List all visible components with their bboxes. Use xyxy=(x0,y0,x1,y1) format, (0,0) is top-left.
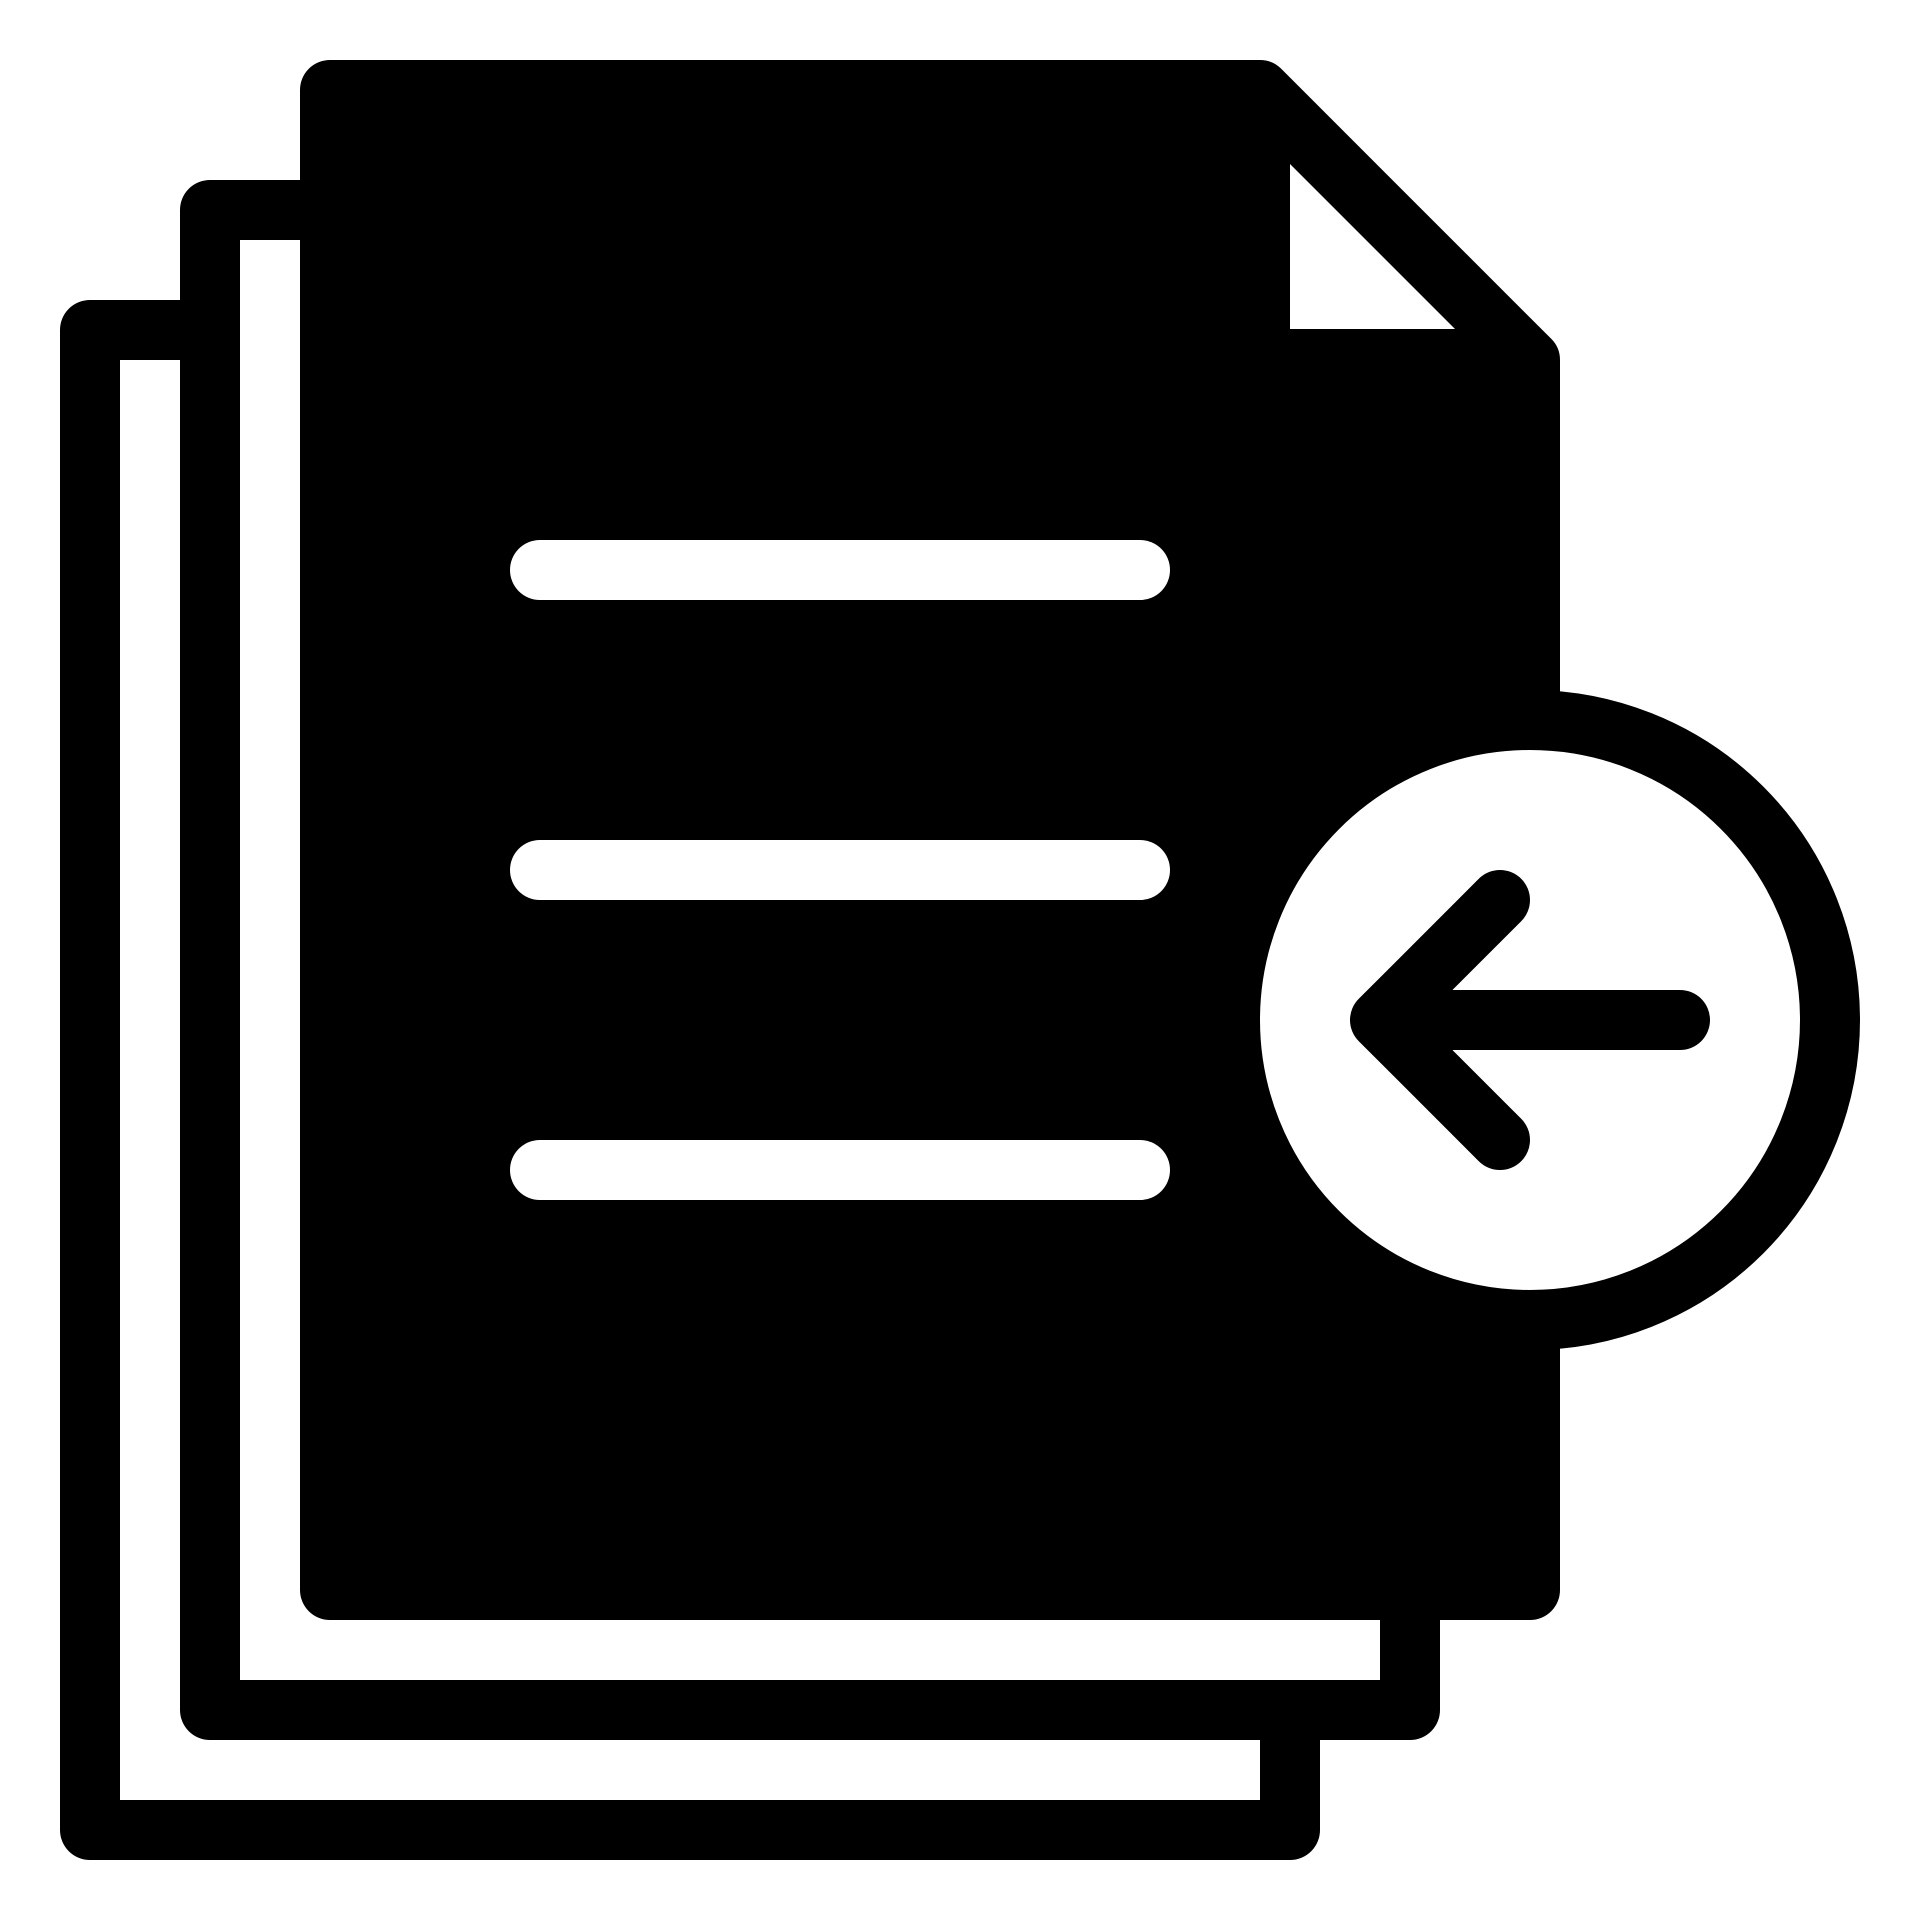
arrow badge xyxy=(1230,720,1830,1320)
middle page outline xyxy=(210,210,1410,1710)
page body xyxy=(330,90,1530,1590)
badge circle xyxy=(1230,720,1830,1320)
front page xyxy=(330,90,1530,1590)
text line 2 xyxy=(540,840,1140,900)
middle page xyxy=(210,210,1410,1710)
text line 3 xyxy=(540,1140,1140,1200)
middle page interior xyxy=(240,240,1380,1680)
left arrow xyxy=(1380,900,1680,1140)
text line 1 xyxy=(540,540,1140,600)
back page xyxy=(90,330,1290,1830)
page corner fold xyxy=(1290,164,1455,329)
